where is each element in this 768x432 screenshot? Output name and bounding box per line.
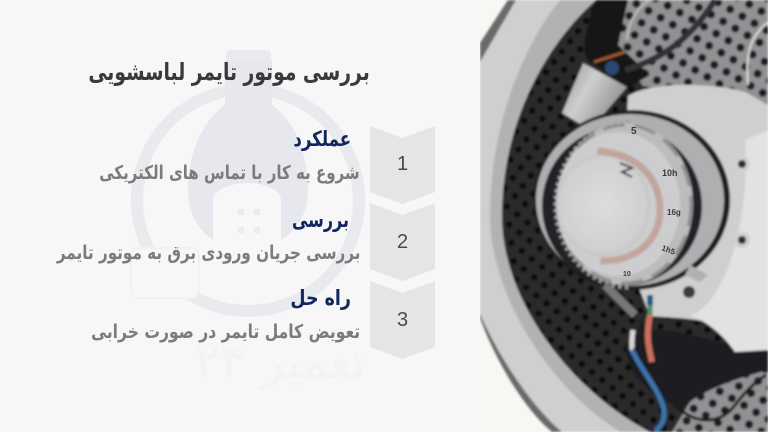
dial mark: [620, 163, 632, 177]
step 1 description: شروع به کار با تماس های الکتریکی: [100, 162, 360, 184]
step 1 heading: عملکرد: [293, 127, 351, 151]
lower clamp: [685, 265, 708, 282]
dial numbers: 5: [631, 126, 637, 137]
watermark logo: [131, 50, 366, 390]
lower right perforated: [670, 370, 768, 432]
step 3 heading: راه حل: [291, 286, 351, 310]
gear teeth: [558, 125, 630, 285]
dial numbers: [623, 126, 681, 278]
dial numbers: 16g: [667, 208, 681, 217]
perforated drum dark: [502, 0, 768, 432]
title: بررسی موتور تایمر لباسشویی: [89, 58, 370, 86]
step 2 description: بررسی جریان ورودی برق به موتور تایمر: [56, 242, 360, 264]
step 2 chevron: [370, 203, 435, 281]
watermark logo: تعمیر ۲۴: [194, 334, 366, 390]
upper right perforated panel: [616, 0, 768, 106]
photo: washing machine timer motor: [480, 0, 768, 432]
step 2 heading: بررسی: [292, 208, 349, 232]
step 1 chevron: [370, 126, 435, 204]
top wires shadow: [585, 0, 650, 88]
step 1 number: 1: [397, 153, 408, 175]
copper ring: [598, 151, 660, 261]
black collar ring: [534, 110, 730, 290]
drum rim band: [480, 0, 620, 432]
wires top: [625, 0, 715, 70]
step 3 number: 3: [397, 309, 408, 331]
silver cylinder: [562, 63, 627, 130]
step 3 description: تعویض کامل تایمر در صورت خرابی: [91, 321, 360, 343]
drum rim outer edge: [480, 0, 562, 432]
step 2 number: 2: [397, 231, 408, 253]
dial knob: [578, 180, 627, 231]
white hub bracket: [625, 82, 768, 323]
cable bundle: [647, 295, 653, 305]
dial numbers: 10: [623, 271, 631, 278]
dial numbers: 10h: [662, 168, 678, 178]
dial numbers: 1h5: [660, 243, 677, 257]
dial segments: [557, 123, 693, 285]
step 3 chevron: [370, 281, 435, 359]
